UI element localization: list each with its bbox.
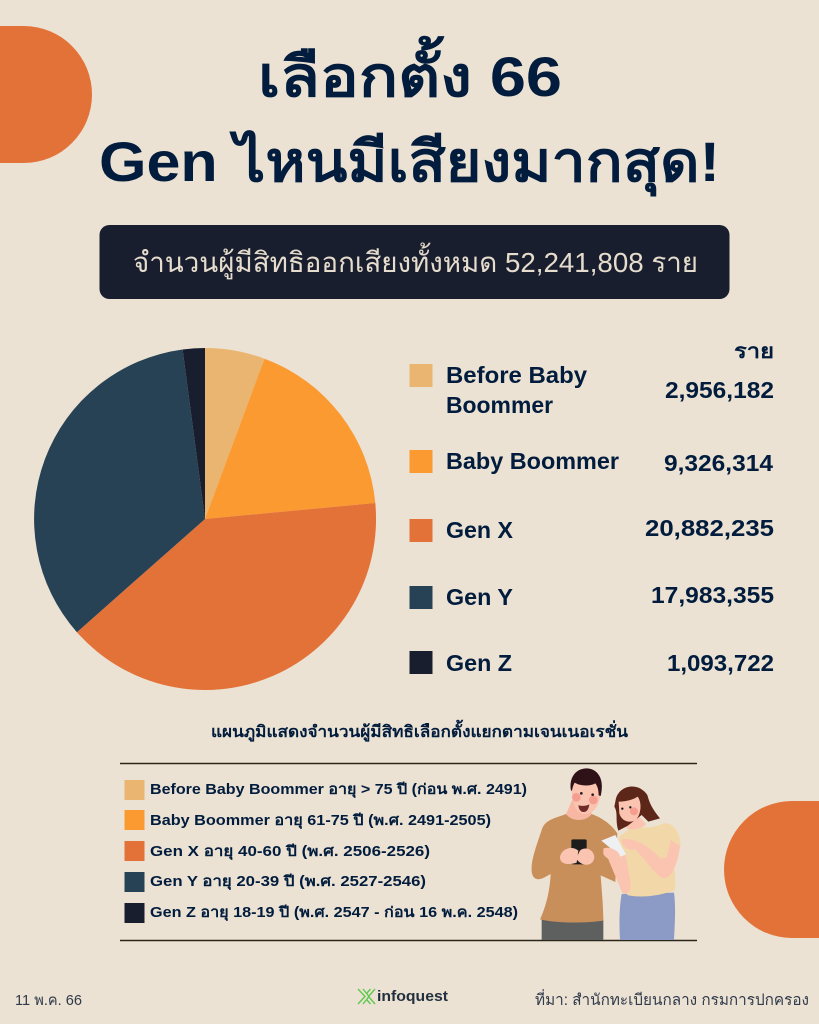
definition: Baby Boommer: Baby Boommer อายุ 61-75 ปี (พ.ศ. 2491-2505) [150, 812, 491, 829]
definition: Gen X [124, 841, 430, 861]
total voters banner: จำนวนผู้มีสิทธิออกเสียงทั้งหมด 52,241,808 ราย [133, 242, 698, 280]
woman [601, 787, 681, 940]
row: Gen Y [410, 582, 774, 610]
decorative shape: right orange [724, 801, 819, 938]
man [532, 768, 617, 940]
definition: Gen Z: Gen Z อายุ 18-19 ปี (พ.ศ. 2547 - ก่อน 16 พ.ค. 2548) [150, 904, 518, 921]
legend with values [410, 341, 774, 676]
source: ที่มา: สำนักทะเบียนกลาง กรมการปกครอง [535, 989, 809, 1009]
title: เลือกตั้ง 66 [258, 36, 562, 108]
row: Baby Boommer: Baby Boommer [446, 448, 619, 474]
definition: Gen Y: Gen Y อายุ 20-39 ปี (พ.ศ. 2527-2546) [150, 873, 426, 890]
row: Before Baby Boommer: 2,956,182 [665, 377, 774, 403]
row: Gen Z [410, 650, 774, 676]
infoquest logo: infoquest [377, 989, 448, 1005]
row: Gen X [410, 515, 774, 543]
logo mark [358, 989, 375, 1004]
unit label: ราย [734, 341, 774, 363]
title [99, 36, 720, 197]
definition: Gen Z [124, 903, 518, 923]
row: Gen Y: 17,983,355 [651, 582, 774, 608]
definition: Gen Y [124, 872, 426, 892]
total voters banner [100, 225, 730, 299]
definition: Baby Boommer [124, 810, 491, 830]
row: Baby Boommer: 9,326,314 [664, 450, 773, 476]
pie chart [34, 348, 376, 690]
definition: Before Baby Boommer: Before Baby Boommer อายุ > 75 ปี (ก่อน พ.ศ. 2491) [150, 781, 527, 798]
definition: Before Baby Boommer [124, 780, 527, 800]
chart caption: แผนภูมิแสดงจำนวนผู้มีสิทธิเลือกตั้งแยกตามเจนเนอเรชั่น [211, 719, 628, 743]
row: Before Baby Boommer: Boommer [446, 392, 553, 418]
title: Gen ไหนมีเสียงมากสุด! [99, 129, 720, 197]
definition: Gen X: Gen X อายุ 40-60 ปี (พ.ศ. 2506-2526) [150, 843, 430, 860]
row: Before Baby Boommer: Before Baby [446, 362, 587, 388]
row: Gen Y: Gen Y [446, 584, 513, 610]
row: Baby Boommer [410, 448, 773, 476]
row: Gen X: Gen X [446, 517, 514, 543]
row: Before Baby Boommer [410, 362, 774, 418]
row: Gen Z: 1,093,722 [667, 650, 774, 676]
decorative shape: top-left orange [0, 26, 92, 163]
date: 11 พ.ค. 66 [15, 992, 82, 1009]
illustration: couple with phones [532, 768, 681, 940]
row: Gen Z: Gen Z [446, 650, 512, 676]
row: Gen X: 20,882,235 [645, 515, 774, 541]
generation definitions [124, 780, 527, 923]
